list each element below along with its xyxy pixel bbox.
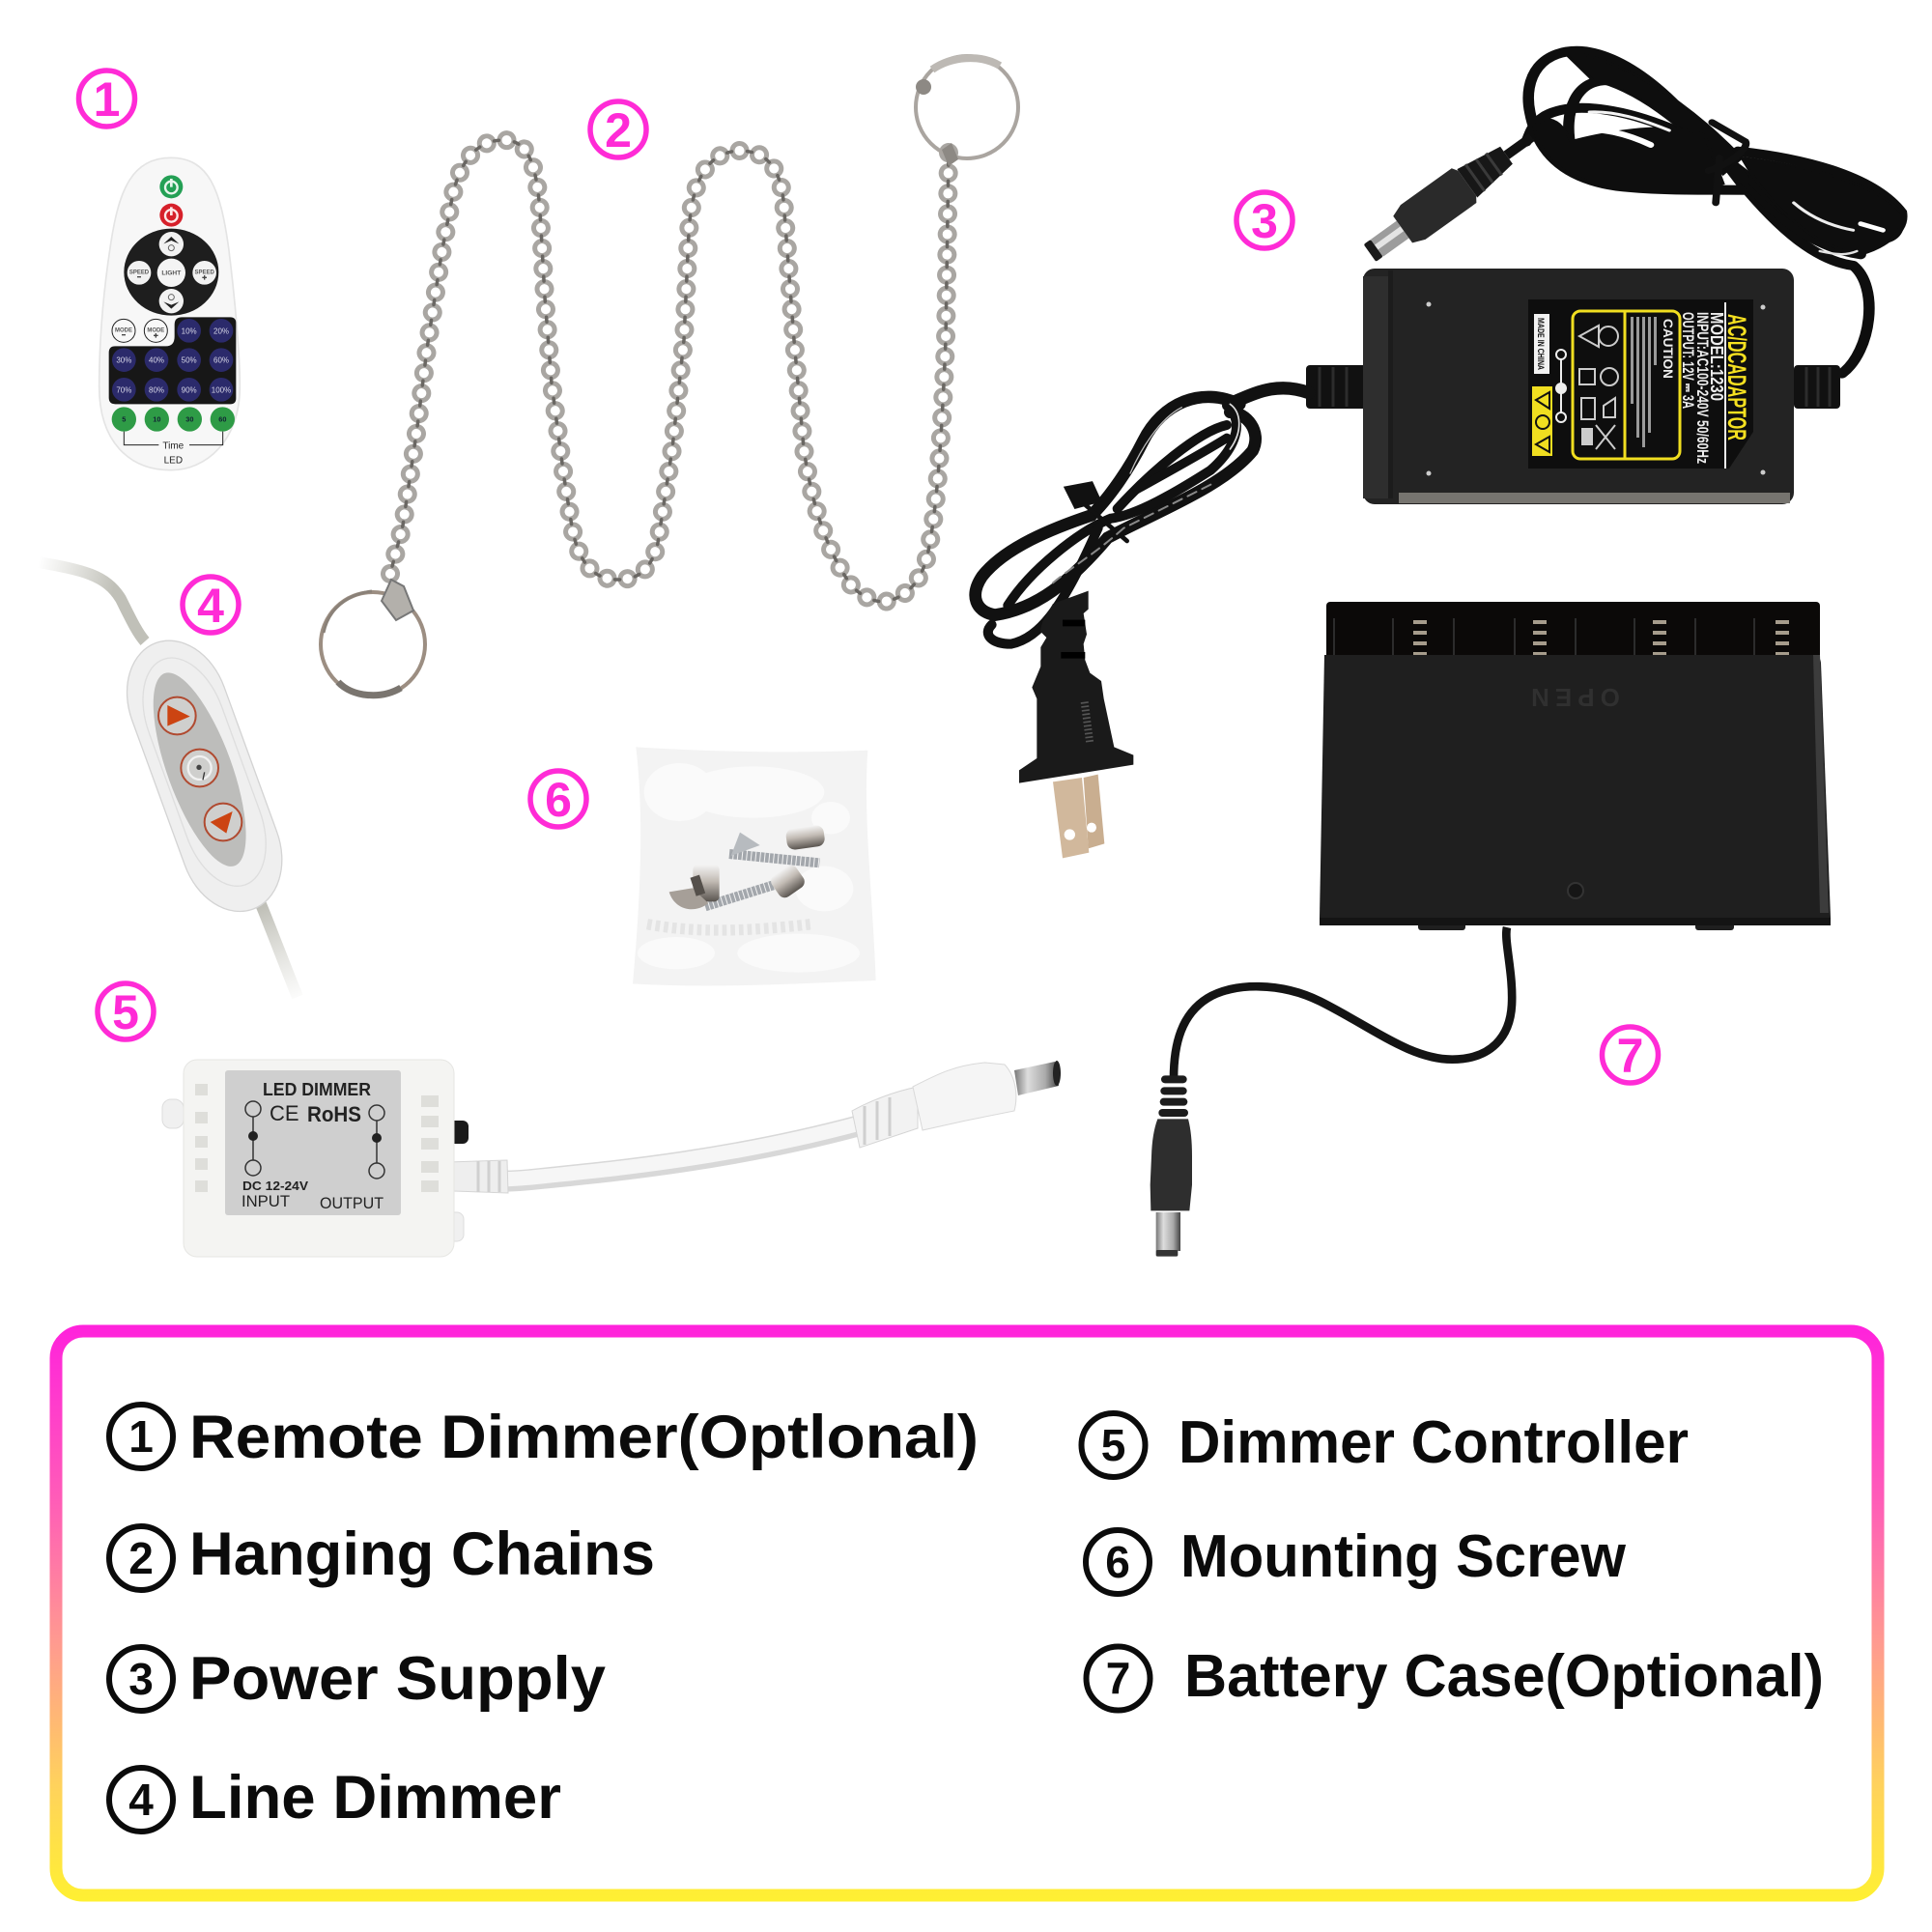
number badge 4 <box>183 577 239 633</box>
plug neck and body <box>1019 591 1133 783</box>
item 7: battery case <box>1151 602 1831 1257</box>
brightness buttons: 90% <box>182 385 197 394</box>
coiled output cable <box>1526 51 1902 374</box>
AC power cord and plug <box>976 388 1309 858</box>
number badge 3: 3 <box>1251 194 1278 248</box>
number badge 6: 6 <box>545 773 572 827</box>
bag highlights <box>638 763 860 973</box>
item 5: dimmer controller <box>162 1060 1061 1257</box>
number badge 5 <box>98 983 154 1039</box>
mode buttons: MODE <box>115 328 132 334</box>
output cable <box>448 1125 860 1181</box>
number badge 2: 2 <box>605 103 632 157</box>
timer buttons: 5 <box>122 415 126 424</box>
legend item 3: 3 <box>128 1654 154 1704</box>
polarity symbol <box>1556 350 1566 422</box>
time bracket and LED label <box>124 432 223 467</box>
down button <box>205 804 242 840</box>
inner rim line <box>128 646 282 898</box>
legend item 6: Mounting Screw <box>1180 1523 1627 1590</box>
legend item 5: 5 <box>1101 1420 1125 1470</box>
controller label <box>225 1070 401 1215</box>
springs <box>1420 620 1782 655</box>
DC barrel plug <box>1357 120 1544 270</box>
item 6: mounting screws in bag <box>633 747 876 985</box>
legend panel <box>56 1331 1878 1895</box>
brightness buttons: 80% <box>149 385 164 394</box>
direction pad: SPEED <box>129 270 150 276</box>
mode buttons <box>112 319 167 342</box>
controller label: OUTPUT <box>320 1194 384 1212</box>
battery compartment <box>1326 602 1820 660</box>
connector <box>852 1061 1061 1148</box>
number badge 6 <box>530 771 586 827</box>
number badge 3 <box>1236 192 1293 248</box>
number badge 2 <box>590 101 646 157</box>
brightness buttons: 70% <box>116 385 131 394</box>
number badge 7 <box>1602 1027 1658 1083</box>
center button <box>181 750 218 786</box>
legend item 5: Dimmer Controller <box>1179 1409 1689 1476</box>
open embossing: OPEN <box>1525 683 1620 712</box>
brightness buttons: 60% <box>213 356 229 365</box>
legend item 4: 4 <box>128 1775 154 1825</box>
plug tip <box>1156 1212 1180 1251</box>
strain relief near box <box>448 1160 508 1193</box>
legend item 7: 7 <box>1106 1653 1130 1703</box>
nickel cap right <box>785 824 826 851</box>
legend item 6: 6 <box>1105 1537 1130 1587</box>
dimmer body <box>110 626 298 925</box>
brightness buttons <box>109 317 236 404</box>
bottom left ring <box>321 580 425 696</box>
adapter label <box>1528 299 1753 469</box>
adapter body <box>1363 269 1794 504</box>
output text: OUTPUT: 12V ⎓ 3A <box>1679 312 1697 409</box>
brightness buttons: 40% <box>149 356 164 365</box>
time bracket and LED label: Time <box>162 440 185 451</box>
direction pad: SPEED <box>195 270 214 276</box>
yellow warning tag <box>1532 386 1552 456</box>
black sensor <box>442 1121 469 1144</box>
legend item 7: Battery Case(Optional) <box>1184 1643 1824 1710</box>
number badge 4: 4 <box>197 579 224 633</box>
timer buttons: 30 <box>185 415 193 424</box>
battery cable <box>1151 927 1512 1257</box>
controller label: LED DIMMER <box>263 1080 371 1099</box>
plastic bag <box>633 747 876 985</box>
plug ribs <box>1158 1075 1188 1117</box>
caution lines <box>1631 317 1657 447</box>
timer buttons: 10 <box>153 415 160 424</box>
battery cover <box>1320 655 1831 925</box>
compliance icons <box>1579 326 1618 449</box>
item 1: remote dimmer <box>99 157 240 470</box>
chain links <box>390 140 949 602</box>
item 3: power supply <box>976 51 1902 858</box>
legend item 2: Hanging Chains <box>189 1520 655 1588</box>
screw head <box>731 833 760 856</box>
yellow box <box>1573 311 1680 459</box>
mode buttons: MODE <box>147 328 164 334</box>
plug blades <box>1053 775 1104 858</box>
brightness buttons: 30% <box>116 356 131 365</box>
screw shafts <box>705 854 819 906</box>
up button <box>158 697 196 734</box>
number badge 5: 5 <box>112 985 139 1039</box>
brightness buttons: 10% <box>182 327 197 335</box>
remote body <box>99 157 240 470</box>
power off button <box>159 204 183 227</box>
direction pad <box>124 229 218 316</box>
silver panel <box>134 663 265 877</box>
power on button <box>159 175 183 198</box>
timer buttons <box>112 407 235 432</box>
number badge 1 <box>79 71 135 127</box>
controller case <box>184 1060 454 1257</box>
controller mounting tabs <box>162 1099 464 1241</box>
case notches <box>195 1084 439 1192</box>
controller label: CE <box>270 1101 299 1125</box>
input text: INPUT:AC100-240V 50/60Hz <box>1693 312 1712 464</box>
time bracket and LED label: LED <box>164 456 183 467</box>
made in china tag <box>1534 314 1549 374</box>
number badge 7: 7 <box>1617 1029 1643 1083</box>
direction pad: LIGHT <box>161 270 181 277</box>
item 2: hanging chain <box>321 56 1018 696</box>
controller label: DC 12-24V <box>242 1179 308 1193</box>
model text: MODEL:1230 <box>1707 312 1726 401</box>
adapter right strain relief <box>1794 365 1840 409</box>
adapter left strain relief <box>1306 365 1387 409</box>
plug body <box>1151 1119 1192 1210</box>
timer buttons: 60 <box>218 415 226 424</box>
adaptor title: AC/DCADAPTOR <box>1722 314 1751 440</box>
legend item 1: Remote Dimmer(Optlonal) <box>189 1404 979 1471</box>
legend item 4: Line Dimmer <box>189 1764 561 1832</box>
caution text: CAUTION <box>1661 319 1676 379</box>
bag speckle <box>647 924 811 930</box>
legend item 3: Power Supply <box>189 1645 606 1713</box>
brightness buttons: 100% <box>212 385 231 394</box>
cable upper <box>39 562 145 641</box>
nickel cap left <box>669 865 720 909</box>
number badge 1: 1 <box>94 72 120 127</box>
made in china tag: MADE IN CHINA <box>1536 318 1546 370</box>
plug vents <box>1061 623 1085 655</box>
plug grip <box>1085 702 1090 744</box>
item 4: line dimmer <box>39 562 298 997</box>
cable lower <box>261 904 298 997</box>
controller label: INPUT <box>242 1192 290 1210</box>
legend item 2: 2 <box>128 1533 154 1583</box>
cord bundle <box>976 388 1309 644</box>
nickel cap center <box>768 863 808 900</box>
output cable highlight <box>448 1123 860 1179</box>
cover hole <box>1568 883 1583 898</box>
brightness buttons: 20% <box>213 327 229 335</box>
case feet <box>1418 918 1734 930</box>
brightness buttons: 50% <box>182 356 197 365</box>
legend item 1: 1 <box>128 1411 154 1462</box>
controller label: RoHS <box>307 1102 361 1126</box>
top right ring <box>916 56 1018 166</box>
